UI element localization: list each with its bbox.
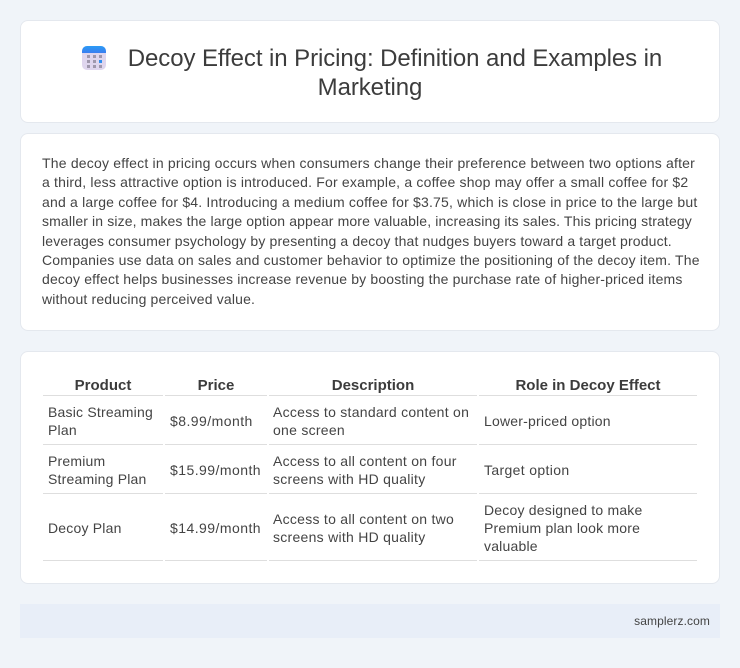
title: Marketing [318, 74, 422, 101]
table row: basic plan: Plan [48, 422, 77, 438]
title [128, 45, 662, 101]
table row: basic plan: Basic Streaming [48, 404, 153, 420]
text block: description paragraph: without reducing perceived value. [42, 291, 255, 307]
panel: comparison table [20, 351, 720, 584]
table header: Price [198, 377, 234, 394]
table row: premium plan: Access to all content on four [273, 453, 457, 469]
table row: decoy plan: Decoy Plan [48, 520, 122, 536]
text block: description paragraph: smaller in size, makes the large option appear more valuable, increasing its sales. This pricing strategy [42, 213, 692, 229]
panel: description [20, 133, 720, 331]
text block: description paragraph: and a large coffee for $4. Introducing a medium coffee for $3.75, which is close in price to the large but [42, 194, 697, 210]
footer bar [20, 604, 720, 638]
table row: decoy plan: valuable [484, 538, 538, 554]
table row: decoy plan: Premium plan look more [484, 520, 640, 536]
table row: premium plan: Target option [484, 462, 570, 478]
table row: premium plan: Premium [48, 453, 105, 469]
table header: Role in Decoy Effect [515, 377, 661, 394]
table row: decoy plan: $14.99/month [170, 520, 261, 536]
text block: description paragraph: decoy effect helps businesses increase revenue by boosting the purchase rate of higher-priced items [42, 271, 682, 287]
table row: decoy plan: screens with HD quality [273, 529, 426, 545]
table header [75, 377, 661, 394]
text block: description paragraph: leverages consumer psychology by presenting a decoy that nudges buyers toward a target product. [42, 233, 672, 249]
table row: decoy plan [48, 502, 642, 554]
title: Decoy Effect in Pricing: Definition and Examples in [128, 45, 662, 72]
table row: basic plan: Access to standard content on [273, 404, 469, 420]
text block: description paragraph: Companies use data on sales and customer behavior to optimize the positioning of the decoy item. The [42, 252, 700, 268]
table row: decoy plan: Access to all content on two [273, 511, 454, 527]
table row: premium plan: Streaming Plan [48, 471, 147, 487]
text block: description paragraph [42, 155, 700, 307]
table row: premium plan [48, 453, 570, 487]
table row: premium plan: screens with HD quality [273, 471, 426, 487]
table row: premium plan: $15.99/month [170, 462, 261, 478]
table row: decoy plan: Decoy designed to make [484, 502, 642, 518]
icon: calendar [82, 46, 106, 70]
text block: description paragraph: The decoy effect in pricing occurs when consumers change their preference between two options after [42, 155, 695, 171]
table row: basic plan: Lower-priced option [484, 413, 611, 429]
table row: basic plan: one screen [273, 422, 345, 438]
panel: title card [20, 20, 720, 123]
table header: Description [332, 377, 414, 394]
text block: description paragraph: a third, less attractive option is introduced. For example, a coffee shop may offer a small coffee for $2 [42, 174, 688, 190]
footer text: samplerz.com [634, 614, 710, 628]
table header: Product [75, 377, 131, 394]
table row: basic plan: $8.99/month [170, 413, 253, 429]
table row: basic plan [48, 404, 611, 438]
